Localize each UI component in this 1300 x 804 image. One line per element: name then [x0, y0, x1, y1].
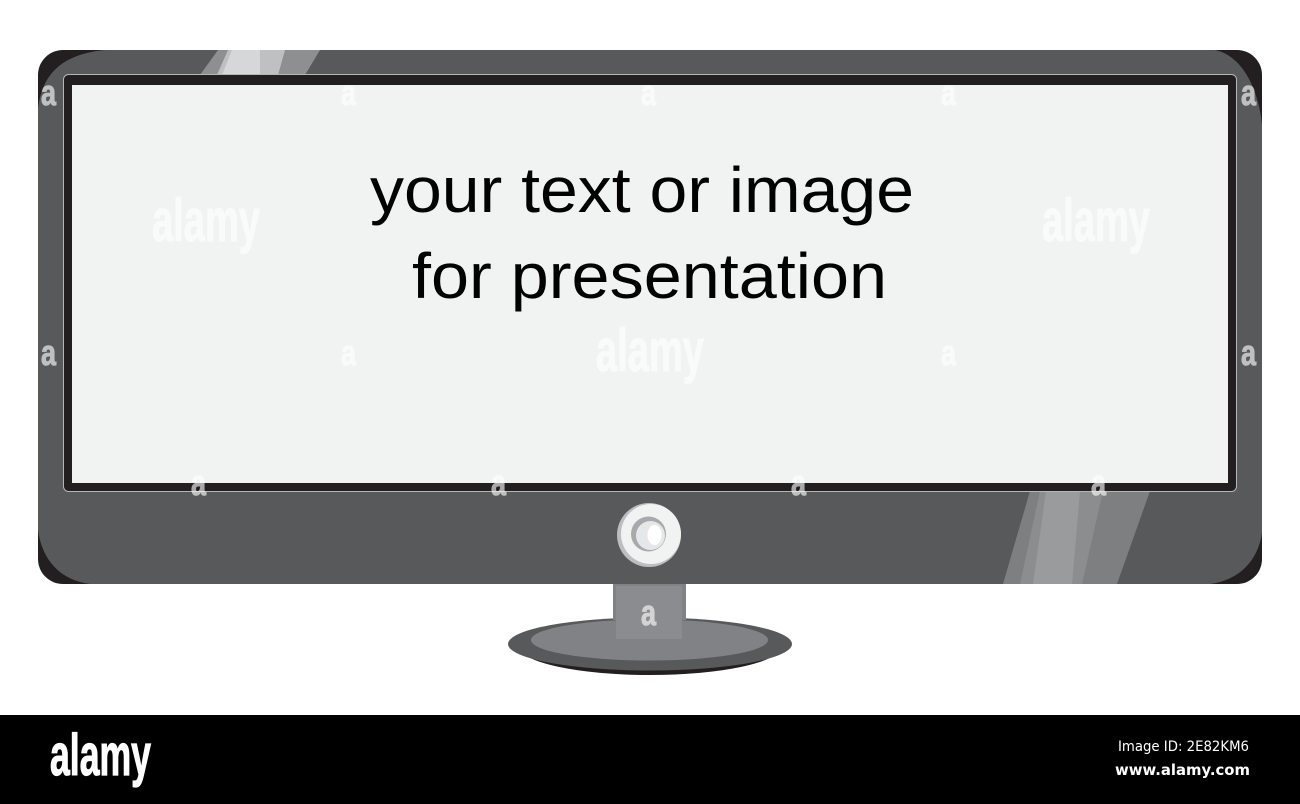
watermark: small marks: a — [341, 72, 357, 113]
watermark: small marks: a — [41, 72, 57, 113]
watermark: alamy right: alamy — [1042, 187, 1150, 254]
watermark: alamy left: alamy — [152, 187, 260, 254]
caption line 2: for presentation — [412, 240, 887, 312]
watermark: small marks: a — [1241, 72, 1257, 113]
watermark: small marks: a — [191, 462, 207, 503]
webcam button — [617, 503, 681, 567]
watermark: small marks: a — [641, 72, 657, 113]
watermark: small marks: a — [641, 592, 657, 633]
top screen glare — [200, 50, 320, 75]
screen caption — [370, 154, 914, 312]
bottom screen glare — [1003, 491, 1150, 584]
watermark: alamy centre: alamy — [596, 317, 704, 384]
watermark: small marks: a — [1091, 462, 1107, 503]
illustration: computer monitor — [38, 50, 1262, 675]
watermark: small marks: a — [41, 332, 57, 373]
monitor stand neck — [613, 583, 686, 639]
monitor body — [38, 50, 1262, 584]
image id: Image ID: 2E82KM6 — [1118, 739, 1249, 755]
footer bar — [0, 715, 1300, 804]
watermark: small marks: a — [941, 72, 957, 113]
footer logo: alamy — [50, 723, 151, 788]
watermark: small marks: a — [941, 332, 957, 373]
website: www.alamy.com — [1115, 761, 1250, 779]
watermark: small marks: a — [791, 462, 807, 503]
watermark: small marks: a — [1241, 332, 1257, 373]
watermark: small marks: a — [491, 462, 507, 503]
caption line 1: your text or image — [370, 154, 914, 226]
watermark: small marks — [41, 72, 1257, 633]
screen panel — [72, 85, 1228, 483]
watermark: small marks: a — [341, 332, 357, 373]
watermarks — [41, 72, 1257, 633]
monitor base — [508, 618, 792, 675]
screen bezel — [64, 74, 1236, 492]
